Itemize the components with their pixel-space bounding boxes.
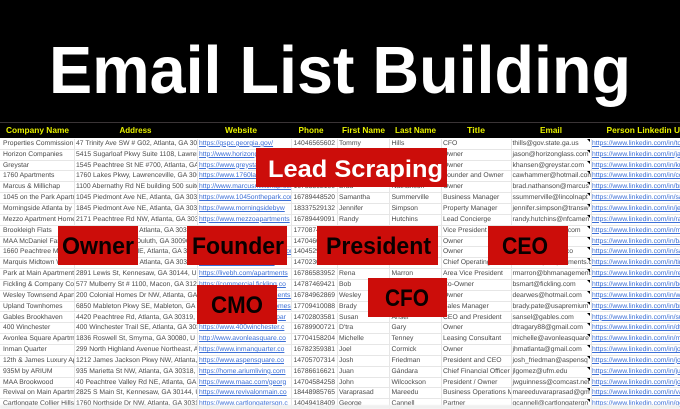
row: 1660 Peachtree: Sam xyxy=(339,248,353,255)
table header labels: Last Name xyxy=(395,125,436,135)
row: 935M by ARIUM: 935 Marietta St NW, Atlanta, GA 30318, xyxy=(76,368,195,375)
row: Marquis Midtown: Marsh xyxy=(392,259,410,266)
row: MAA McDaniel Farm: bart@planet.nl xyxy=(512,238,557,245)
row: Brookleigh Flats: Mark xyxy=(339,227,354,234)
label box: President xyxy=(317,226,438,265)
label box: CEO xyxy=(488,226,568,265)
row: Properties Commission: 14046565602 xyxy=(294,140,335,147)
row: 1760 Apartments xyxy=(0,171,680,182)
row: Brookleigh Flats: Ellis xyxy=(392,227,404,234)
row: 935M by ARIUM: Chief Financial Officer xyxy=(443,368,510,375)
row: Avonlea Square: 1836 Roswell St, Smyrna, GA 30080, U xyxy=(76,335,195,342)
row: Brookleigh Flats: Vice President xyxy=(443,227,487,234)
row: Marcus & Millichap: Owner xyxy=(443,183,463,190)
row: 1760 Apartments: Hammer xyxy=(392,172,418,179)
row: Gables Brookhaven: Ansel xyxy=(392,314,409,320)
row: Cartlongate Collier Hills: George xyxy=(339,400,362,407)
row: 400 Winchester: dtragary88@gmail.com xyxy=(512,324,583,331)
row: Fickling & Company: 14787469421 xyxy=(294,281,335,288)
row: Marcus & Millichap: Marcus & Millichap xyxy=(3,183,60,190)
row: 400 Winchester: Gary xyxy=(392,324,406,331)
row: 1660 Peachtree: 1660 Peachtree Mid xyxy=(3,248,64,255)
row: Avonlea Square: Tenney xyxy=(392,335,413,342)
row: MAA Brookwood: https://www.maac.com/georg xyxy=(199,379,286,386)
row: Marquis Midtown xyxy=(0,258,680,269)
row: Wesley Townsend: Owner xyxy=(443,292,463,299)
row: 12th & James: Friedman xyxy=(392,357,420,364)
row: Revival on Main: https://www.revivalonmain.co xyxy=(199,389,287,396)
row: 1760 Apartments: cawhammer@hotmail.com xyxy=(512,172,591,179)
row: Brookleigh Flats: https://www.brookleigh.com xyxy=(199,227,282,234)
row: Mezzo Apartment Homes: randy.hutchins@nfcamen xyxy=(512,216,589,223)
row: Wesley Townsend: 16784962869 xyxy=(294,292,335,299)
row: Marcus & Millichap: 1100 Abernathy Rd NE building 500 suite xyxy=(76,183,197,190)
row: Mezzo Apartment Homes: Randy xyxy=(339,216,359,223)
row: Avonlea Square: Leasing Consultant xyxy=(443,335,501,342)
row: 12th & James: josh_friedman@aspensq xyxy=(512,357,588,364)
row: Horizon Companies: Owner xyxy=(443,151,463,158)
black role labels: President xyxy=(326,233,431,260)
label box: CFO xyxy=(368,278,447,317)
row: Park at Main xyxy=(0,269,680,280)
row: 12th & James: Josh xyxy=(339,357,353,364)
row: Inman Quarter: Cormick xyxy=(392,346,416,353)
row: Wesley Townsend xyxy=(0,291,680,302)
row: Fickling & Company: Fickling & Company Co xyxy=(3,281,74,288)
row: Cartlongate Collier Hills: Cartlongate Collier Hills xyxy=(3,400,74,407)
row: Park at Main: 16786583952 xyxy=(294,270,335,277)
title: Email List Building xyxy=(49,33,631,108)
row: Gables Brookhaven: sansel@gables.com xyxy=(512,314,574,320)
row: MAA McDaniel Farm xyxy=(0,237,680,247)
row: Gables Brookhaven xyxy=(0,312,680,323)
row: Revival on Main: Mareedu xyxy=(392,389,418,396)
row: Wesley Townsend: dearwes@hotmail.com xyxy=(512,292,582,299)
row: Inman Quarter: Owner xyxy=(443,346,463,353)
row: 1045 on the Park: Samantha xyxy=(339,194,370,201)
row: MAA Brookwood: President / Owner xyxy=(443,379,497,386)
row: Mezzo Apartment Homes: Hutchins xyxy=(392,216,418,223)
row: Park at Main: 2891 Lewis St, Kennesaw, GA 30144, U xyxy=(76,270,197,277)
row: MAA Brookwood: MAA Brookwood xyxy=(3,379,53,386)
row: MAA McDaniel Farm: 14704602210 xyxy=(294,238,335,245)
row: 1045 on the Park: Summerville xyxy=(392,194,429,201)
bottom scrollbar strip xyxy=(0,405,680,409)
row: Inman Quarter: 16782359381 xyxy=(294,346,335,353)
row: Upland Townhomes xyxy=(0,302,680,312)
row: Gables Brookhaven: Gables Brookhaven xyxy=(3,314,63,320)
row: Upland Townhomes: Sales Manager xyxy=(443,303,489,310)
row: 400 Winchester: D'tra xyxy=(339,324,353,331)
row: 935M by ARIUM: 935M by ARIUM xyxy=(3,368,52,375)
row: Wesley Townsend: 200 Colonial Homes Dr NW, Atlanta, GA xyxy=(76,292,197,299)
row: 400 Winchester xyxy=(0,323,680,334)
row: Revival on Main: 18448985765 xyxy=(294,389,335,396)
row: Gables Brookhaven: CEO and President xyxy=(443,314,502,320)
row: 935M by ARIUM xyxy=(0,367,680,378)
row: Horizon Companies xyxy=(0,150,680,161)
row: Properties Commission: CFO xyxy=(443,140,457,147)
row: Gables Brookhaven: 4420 Peachtree Rd, Atlanta, GA 30319, xyxy=(76,314,195,320)
row: 1660 Peachtree: sam@scottgroup.co xyxy=(512,248,573,255)
row: Marcus & Millichap xyxy=(0,182,680,193)
table header labels: Email xyxy=(540,125,562,135)
row: MAA McDaniel Farm: MAA McDaniel Farm xyxy=(3,238,65,245)
row: Cartlongate Collier Hills: gcannell@cartlongatergn xyxy=(512,400,588,407)
row: 12th & James: https://www.aspensquare.co xyxy=(199,357,284,364)
black role labels: CEO xyxy=(502,233,548,260)
row: Wesley Townsend: Wesley xyxy=(339,292,361,299)
row: Properties Commission xyxy=(0,139,680,150)
table header labels: Phone xyxy=(298,125,324,135)
row: MAA Brookwood xyxy=(0,378,680,388)
row: Horizon Companies: 16788267700 xyxy=(294,151,335,158)
black role labels: CMO xyxy=(211,292,263,319)
row: Cartlongate Collier Hills xyxy=(0,399,680,409)
row: Cartlongate Collier Hills: Cannell xyxy=(392,400,415,407)
row: Greystar: 1545 Peachtree St NE #700, Atlanta, GA xyxy=(76,162,197,169)
row: Morningside Atlanta: jennifer.simpson@transw xyxy=(512,205,589,212)
table header labels: Address xyxy=(120,125,152,135)
row: Brookleigh Flats: 17708742210 xyxy=(294,227,335,234)
row: Brookleigh Flats: 1230 Brookleigh Rd, Atlanta, GA 30315 xyxy=(76,227,194,234)
row: 1045 on the Park: 16789448520 xyxy=(294,194,335,201)
row: Greystar: Kurt xyxy=(339,162,351,169)
row: MAA Brookwood: jwguinness@comcast.net xyxy=(512,379,590,386)
row: Marquis Midtown: tim@marquisapartments.c xyxy=(512,259,591,266)
row: 935M by ARIUM: Gándara xyxy=(392,368,418,375)
row: MAA Brookwood: 14704584258 xyxy=(294,379,335,386)
row: Fickling & Company: bsmart@fickling.com xyxy=(512,281,576,288)
row: Cartlongate Collier Hills: Partner xyxy=(443,400,465,407)
row: Marcus & Millichap: Brad xyxy=(339,183,353,190)
label box: Lead Scraping xyxy=(256,148,447,187)
table header rule xyxy=(0,122,680,123)
row: Brookleigh Flats xyxy=(0,226,680,237)
row: Inman Quarter: https://www.inmanquarter.co xyxy=(199,346,284,353)
row: Gables Brookhaven: Susan xyxy=(339,314,358,320)
table header labels: Website xyxy=(225,125,257,135)
spreadsheet table of leads xyxy=(0,138,680,409)
row: 400 Winchester: 16789900721 xyxy=(294,324,335,331)
row: Upland Townhomes: 17709410088 xyxy=(294,303,335,310)
row: Upland Townhomes: Brady xyxy=(339,303,357,310)
row: Mezzo Apartment Homes xyxy=(0,215,680,226)
row: MAA McDaniel Farm: Owner xyxy=(443,238,463,245)
row: Revival on Main: mareeduvaraprasad@gm xyxy=(512,389,590,396)
row: 400 Winchester: Owner xyxy=(443,324,463,331)
row: Avonlea Square: Michelle xyxy=(339,335,364,342)
row: Revival on Main: Varaprasad xyxy=(339,389,374,396)
row: Inman Quarter xyxy=(0,345,680,356)
row: 935M by ARIUM: https://home.ariumliving.com xyxy=(199,368,286,375)
row: 12th & James: 14705707314 xyxy=(294,357,335,364)
row: MAA McDaniel Farm: https://www.maac.com xyxy=(199,238,267,245)
row: Marquis Midtown: Marquis Midtown West xyxy=(3,259,72,266)
row: 935M by ARIUM: 16786616621 xyxy=(294,368,335,375)
row: 1045 on the Park: ssummerville@lincolnapt xyxy=(512,194,588,201)
row: 1045 on the Park xyxy=(0,193,680,204)
row: Marquis Midtown: 1075 Howell Mill Rd, Atlanta, GA 30332 xyxy=(76,259,195,266)
row: Inman Quarter: Joel xyxy=(339,346,351,353)
row: Morningside Atlanta: 18337529132 xyxy=(294,205,335,212)
row: Gables Brookhaven: https://www.gables.com/apar xyxy=(199,314,286,320)
label box: CMO xyxy=(197,285,277,324)
row: MAA McDaniel Farm: 3590 Satellite Blvd, Duluth, GA 30096 xyxy=(76,238,190,245)
row: Fickling & Company: Bob xyxy=(339,281,351,288)
row: 1660 Peachtree xyxy=(0,247,680,258)
row: Fickling & Company: Co-Owner xyxy=(443,281,474,288)
label: Lead Scraping: Lead Scraping xyxy=(268,156,443,183)
row: Upland Townhomes: Upland Townhomes xyxy=(3,303,63,310)
row: Marcus & Millichap: Nathanson xyxy=(392,183,424,190)
row: Upland Townhomes: Pate xyxy=(392,303,405,310)
row: Cartlongate Collier Hills: https://www.cartlongatersgn.c xyxy=(199,400,288,407)
row: Marquis Midtown: https://www.marquis.com xyxy=(199,259,275,266)
row: Morningside Atlanta: https://www.morningsidebyw xyxy=(199,205,285,212)
row: Upland Townhomes: 6850 Mableton Pkwy SE, Mableton, GA xyxy=(76,303,195,310)
row: Fickling & Company xyxy=(0,280,680,291)
row: Morningside Atlanta: Jennifer xyxy=(339,205,363,212)
table header labels: Company Name xyxy=(6,125,69,135)
row: Fickling & Company: Smart xyxy=(392,281,410,288)
row: MAA Brookwood: Wilcockson xyxy=(392,379,426,386)
black role labels: Founder xyxy=(192,233,284,260)
black role labels: CFO xyxy=(385,285,429,312)
row: Morningside Atlanta: Simpson xyxy=(392,205,418,212)
row: Horizon Companies: http://www.horizonglass.com xyxy=(199,151,285,158)
row: Avonlea Square xyxy=(0,334,680,345)
row: Greystar: 14045550100 xyxy=(294,162,335,169)
row: Morningside Atlanta: Property Manager xyxy=(443,205,497,212)
row: Marcus & Millichap: brad.nathanson@marcus xyxy=(512,183,589,190)
label box: Founder xyxy=(187,226,287,265)
row: Greystar: Owner xyxy=(443,162,463,169)
row: Marquis Midtown: 14702302210 xyxy=(294,259,335,266)
row: Park at Main: https://livebh.com/apartments xyxy=(199,270,288,277)
row: Greystar: https://www.greystar.com xyxy=(199,162,275,169)
row: Greystar xyxy=(0,161,680,171)
row: Properties Commission: Tommy xyxy=(339,140,361,147)
row: Properties Commission: Hills xyxy=(392,140,404,147)
row: MAA McDaniel Farm: Vries xyxy=(392,238,407,245)
row: Cartlongate Collier Hills: 14049418409 xyxy=(294,400,335,407)
row: Horizon Companies: Jason xyxy=(339,151,357,158)
row: Gables Brookhaven: 14702803581 xyxy=(294,314,335,320)
row: 1760 Apartments: 17705550142 xyxy=(294,172,335,179)
row: Avonlea Square: michelle@avonleasquare xyxy=(512,335,589,342)
row: Revival on Main xyxy=(0,388,680,399)
row: Horizon Companies: Horizon Companies xyxy=(3,151,63,158)
row: 12th & James xyxy=(0,356,680,367)
row: Inman Quarter: Inman Quarter xyxy=(3,346,47,353)
row: Morningside Atlanta: Morningside Atlanta by xyxy=(3,205,72,212)
row: Morningside Atlanta xyxy=(0,204,680,215)
row: Park at Main: Marron xyxy=(392,270,413,277)
label box: Owner xyxy=(58,226,138,265)
row: MAA Brookwood: John xyxy=(339,379,354,386)
row: Brookleigh Flats: Brookleigh Flats xyxy=(3,227,52,234)
table header labels xyxy=(6,125,680,135)
row: 1760 Apartments: 1760 Apartments xyxy=(3,172,54,179)
row: Mezzo Apartment Homes: 16789449091 xyxy=(294,216,335,223)
row: Horizon Companies: Horizon xyxy=(392,151,415,158)
row: Park at Main: Rena xyxy=(339,270,355,277)
row: 935M by ARIUM: Juan xyxy=(339,368,354,375)
row: Greystar: Greystar xyxy=(3,162,29,169)
row: MAA McDaniel Farm: Bart xyxy=(339,238,351,245)
row: Park at Main: rmarron@bhmanagement xyxy=(512,270,590,277)
row: 1660 Peachtree: Owner xyxy=(443,248,463,255)
row: 1660 Peachtree: 14045292210 xyxy=(294,248,335,255)
row: Marquis Midtown: Tim xyxy=(339,259,350,266)
row: Mezzo Apartment Homes: Lead Concierge xyxy=(443,216,491,223)
row: Marquis Midtown: Chief Operating Officer xyxy=(443,259,511,266)
row: Avonlea Square: http://www.avonleasquare.co xyxy=(199,335,286,342)
row: Marcus & Millichap: 16788862100 xyxy=(294,183,335,190)
row: 935M by ARIUM: jlgomez@ufm.edu xyxy=(512,368,567,375)
row: 1660 Peachtree: Scott xyxy=(392,248,407,255)
black role labels xyxy=(62,233,548,319)
row: 400 Winchester: 400 Winchester xyxy=(3,324,50,331)
row: 12th & James: President and CEO xyxy=(443,357,502,364)
row: 1760 Apartments: https://www.1760lakes.com xyxy=(199,172,281,179)
row: Horizon Companies: jason@horizonglass.com xyxy=(512,151,589,158)
row: Mezzo Apartment Homes: https://www.mezzoapartments xyxy=(199,216,290,223)
row: Properties Commission: https://gspc.georgia.gov/ xyxy=(199,140,273,147)
row: 400 Winchester: https://www.400winchester.c xyxy=(199,324,284,331)
row: 1760 Apartments: Founder and Owner xyxy=(443,172,503,179)
row: 1760 Apartments: Cody xyxy=(339,172,355,179)
row: Inman Quarter: jhmatlanta@gmail.com xyxy=(512,346,582,353)
row: Greystar: Hansen xyxy=(392,162,415,169)
table header labels: Title xyxy=(467,125,485,135)
row: Park at Main: Area Vice President xyxy=(443,270,503,277)
table header labels: First Name xyxy=(342,125,385,135)
black role labels: Owner xyxy=(62,233,134,260)
row: Fickling & Company: https://commercial.fickling.co xyxy=(199,281,286,288)
row: Properties Commission: Properties Commission xyxy=(3,140,73,147)
row: Avonlea Square: 17704158204 xyxy=(294,335,335,342)
row: Brookleigh Flats: mark@brookleigh.com xyxy=(512,227,581,234)
row: Properties Commission: thills@gov.state.ga.us xyxy=(512,140,579,147)
row: 1045 on the Park: Business Manager xyxy=(443,194,499,201)
row: Wesley Townsend: Dear xyxy=(392,292,406,299)
row: Upland Townhomes: brady.pate@usapremium xyxy=(512,303,588,310)
row: Greystar: khansen@greystar.com xyxy=(512,162,584,169)
